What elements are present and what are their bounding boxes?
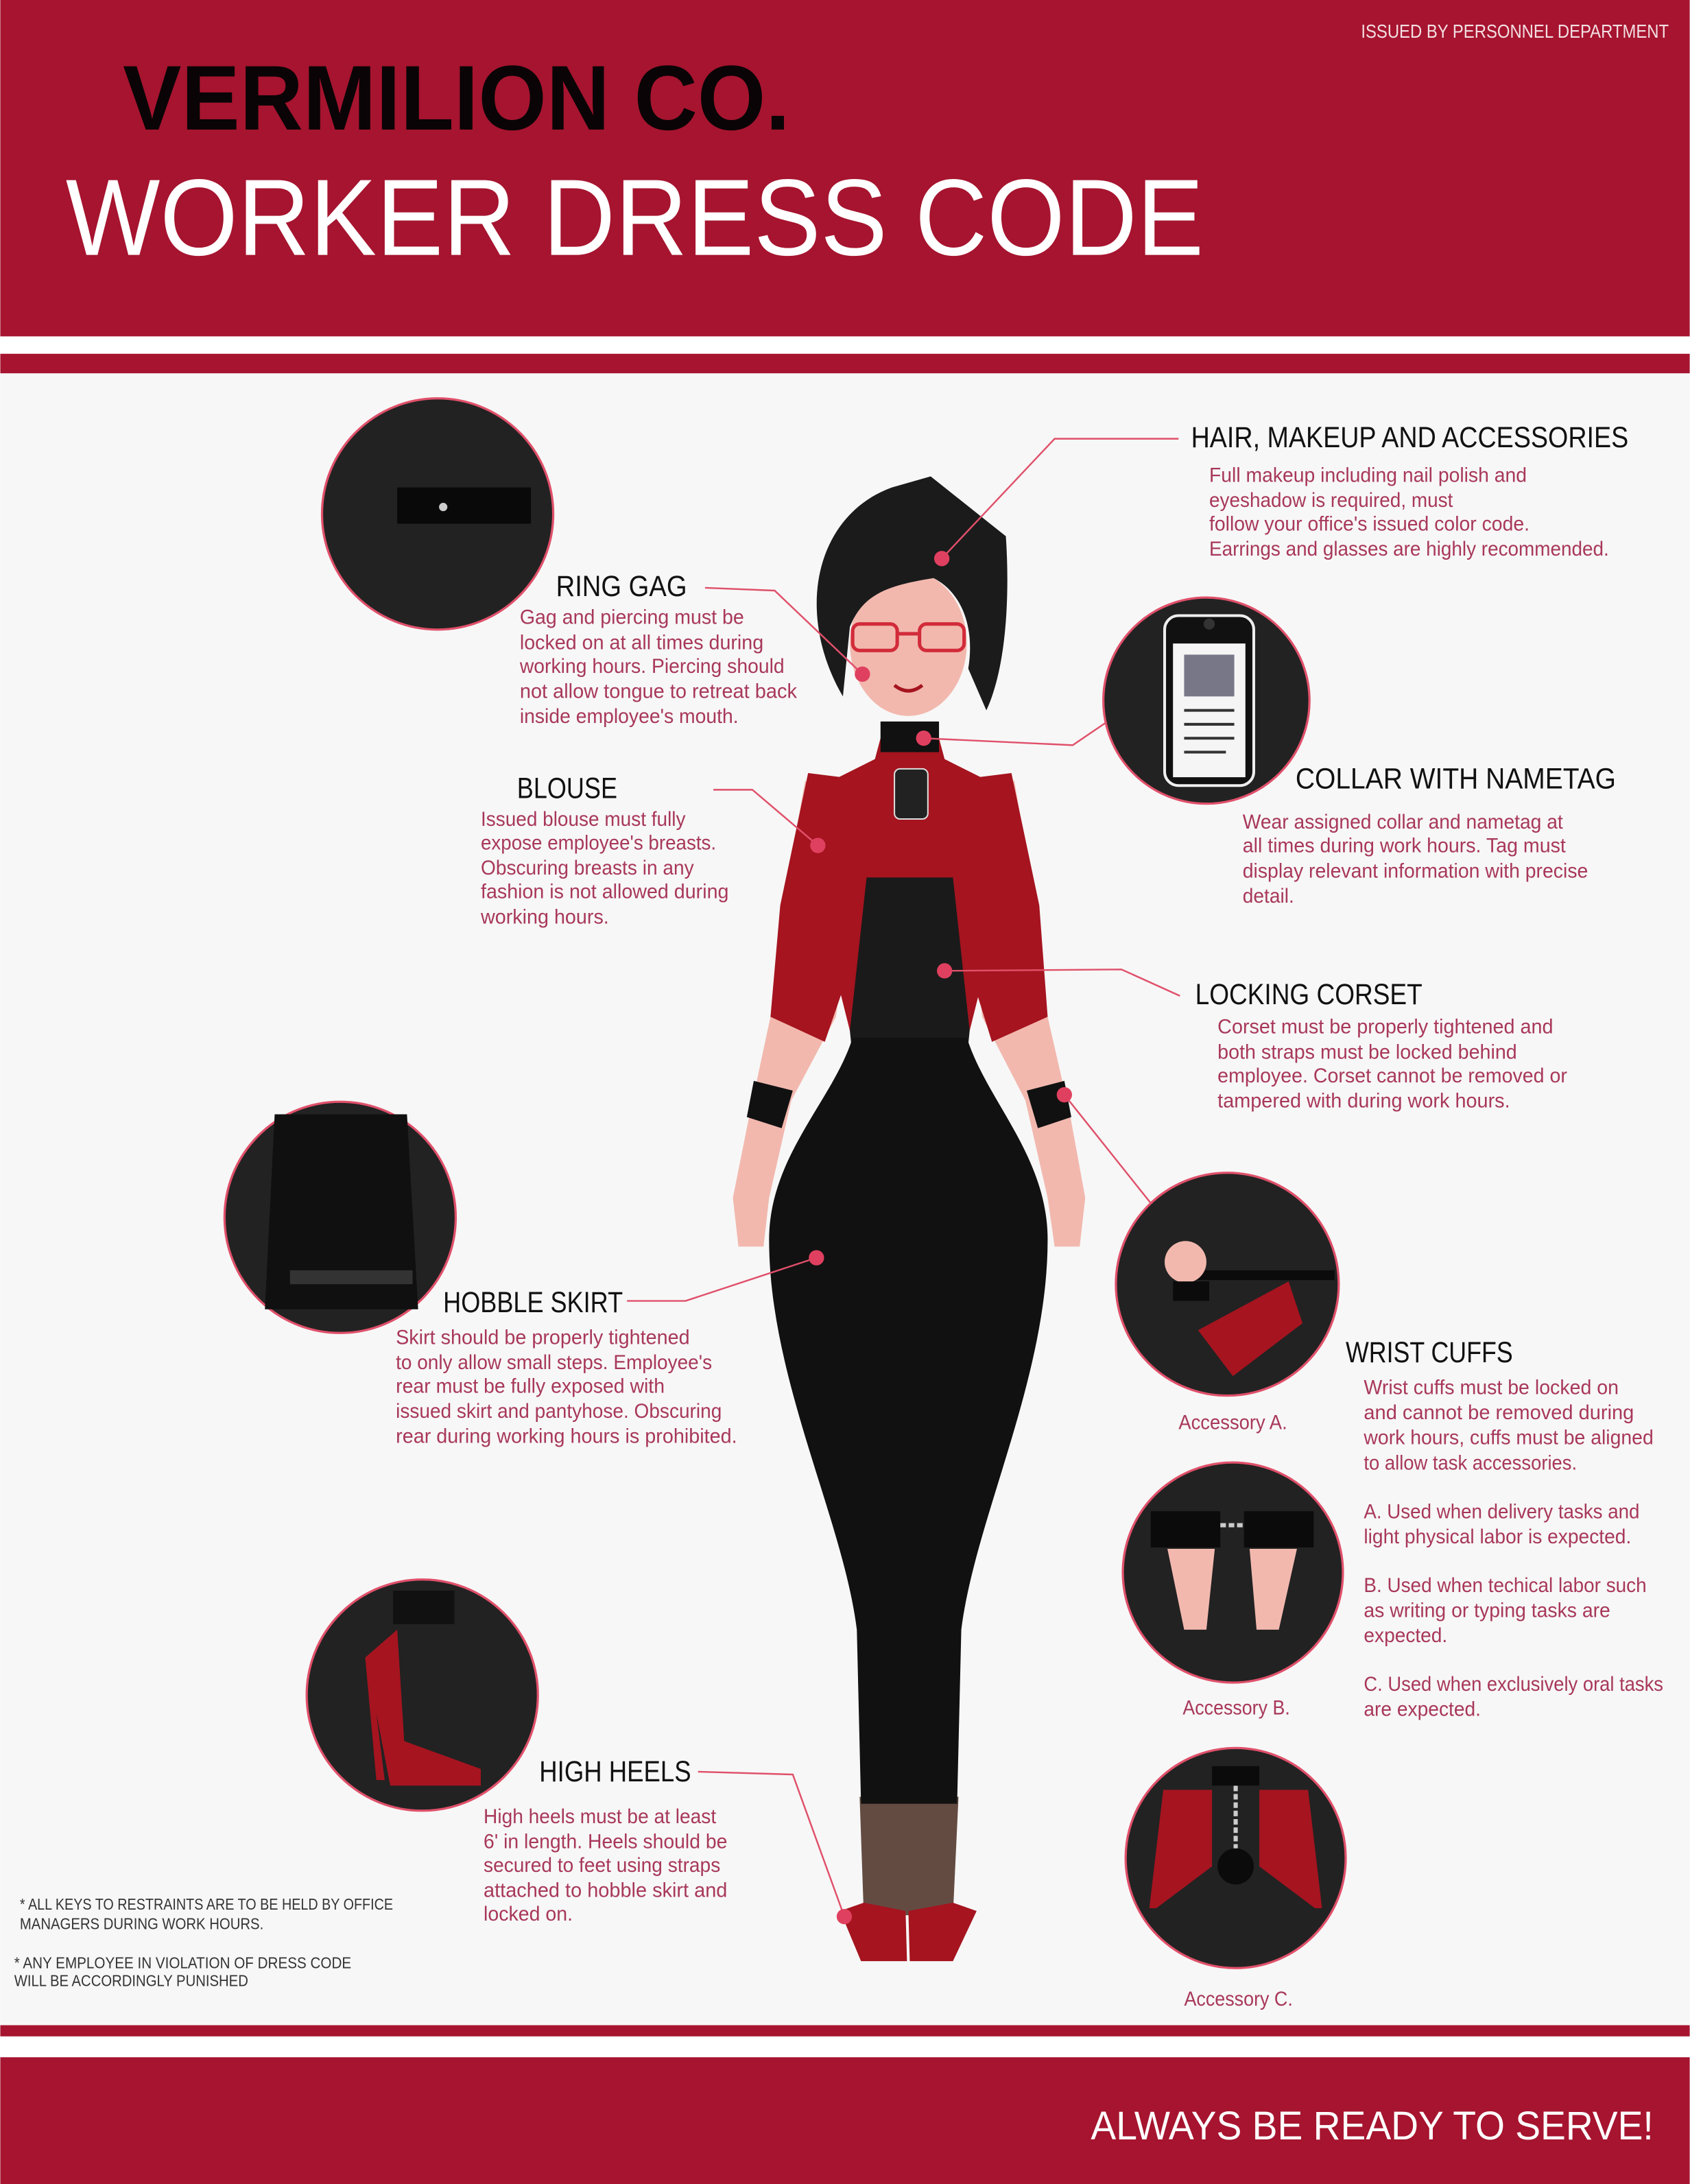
section: locking corset: tampered with during work hours. xyxy=(1217,1089,1510,1112)
section: wrist cuffs: WRIST CUFFS xyxy=(1346,1336,1513,1369)
content panel xyxy=(0,354,1690,2037)
section: wrist cuffs: light physical labor is expected. xyxy=(1364,1526,1631,1548)
callout circle: ring gag strap xyxy=(322,399,554,630)
section: hair, makeup and accessories: Earrings and glasses are highly recommended. xyxy=(1209,538,1609,560)
section: wrist cuffs: expected. xyxy=(1364,1624,1447,1647)
callout circle: accessory A xyxy=(1116,1173,1339,1396)
section: ring gag: Gag and piercing must be xyxy=(520,606,744,629)
section: hair, makeup and accessories: eyeshadow is required, must xyxy=(1209,489,1453,512)
section: high heels xyxy=(484,1755,727,1925)
section: wrist cuffs xyxy=(1346,1336,1663,1721)
section: ring gag: not allow tongue to retreat back xyxy=(520,680,797,702)
section: collar with nametag: Wear assigned collar and nametag at xyxy=(1243,811,1563,833)
section: wrist cuffs: A. Used when delivery tasks and xyxy=(1364,1500,1639,1523)
legs xyxy=(859,1796,958,1915)
section: hobble skirt: Skirt should be properly tightened xyxy=(396,1327,690,1349)
callout circle: hobble skirt strap xyxy=(224,1102,455,1333)
section: hobble skirt: to only allow small steps. Employee's xyxy=(396,1351,712,1374)
section: high heels: secured to feet using straps xyxy=(484,1854,720,1877)
left arm xyxy=(733,780,853,1246)
section: locking corset: LOCKING CORSET xyxy=(1195,978,1423,1011)
section: blouse: expose employee's breasts. xyxy=(481,832,716,855)
section: wrist cuffs: Wrist cuffs must be locked on xyxy=(1364,1377,1619,1399)
section: high heels: HIGH HEELS xyxy=(539,1755,691,1788)
caption: accessory B: Accessory B. xyxy=(1182,1697,1290,1720)
section: blouse: Obscuring breasts in any xyxy=(481,857,694,879)
section: blouse: BLOUSE xyxy=(517,772,617,805)
glasses xyxy=(853,624,964,650)
footer band xyxy=(0,2057,1690,2184)
section: wrist cuffs: C. Used when exclusively oral tasks xyxy=(1364,1673,1663,1696)
section: hair, makeup and accessories: HAIR, MAKEUP AND ACCESSORIES xyxy=(1191,421,1628,454)
section: wrist cuffs: to allow task accessories. xyxy=(1364,1451,1577,1474)
clothed stand-in figure xyxy=(733,476,1085,1961)
section: high heels: 6' in length. Heels should be xyxy=(484,1831,727,1853)
section: blouse: Issued blouse must fully xyxy=(481,808,686,831)
section: collar with nametag xyxy=(1243,762,1616,907)
callout circle: accessory B xyxy=(1123,1462,1343,1683)
section: ring gag: working hours. Piercing should xyxy=(519,655,785,678)
connector lines xyxy=(627,439,1180,1924)
section: hobble skirt: rear during working hours is prohibited. xyxy=(396,1425,737,1448)
high-neck top xyxy=(805,738,1014,1031)
corset xyxy=(850,877,970,1087)
section: hair, makeup and accessories xyxy=(1191,421,1628,560)
section: blouse: fashion is not allowed during xyxy=(481,881,728,903)
section: blouse xyxy=(480,772,728,928)
footnotes: * ANY EMPLOYEE IN VIOLATION OF DRESS CODE xyxy=(14,1954,351,1971)
callout circle: nametag xyxy=(1104,597,1309,804)
footnotes: MANAGERS DURING WORK HOURS. xyxy=(20,1914,263,1932)
section: wrist cuffs: B. Used when techical labor such xyxy=(1364,1574,1647,1597)
section: locking corset xyxy=(1195,978,1567,1112)
section: high heels: attached to hobble skirt and xyxy=(484,1879,727,1902)
section: blouse: working hours. xyxy=(480,905,609,928)
callout circle: high heel xyxy=(307,1580,538,1811)
hobble skirt xyxy=(769,1038,1047,1804)
slogan: ALWAYS BE READY TO SERVE! xyxy=(1091,2104,1654,2148)
nametag xyxy=(894,769,928,819)
hair xyxy=(817,476,1008,711)
section: locking corset: both straps must be locked behind xyxy=(1217,1041,1517,1063)
section: hobble skirt: rear must be fully exposed with xyxy=(396,1375,665,1398)
section: locking corset: Corset must be properly tightened and xyxy=(1217,1016,1554,1038)
footnotes: * ALL KEYS TO RESTRAINTS ARE TO BE HELD BY OFFICE xyxy=(20,1895,393,1913)
footnotes: WILL BE ACCORDINGLY PUNISHED xyxy=(14,1972,248,1990)
company title: VERMILION CO. xyxy=(123,47,790,150)
caption: accessory A: Accessory A. xyxy=(1178,1411,1287,1434)
shoes xyxy=(840,1903,977,1961)
right sleeve xyxy=(955,773,1047,1042)
callout circle: accessory C xyxy=(1126,1748,1346,1968)
section: ring gag: locked on at all times during xyxy=(520,631,763,654)
section: wrist cuffs: are expected. xyxy=(1364,1698,1481,1721)
section: locking corset: employee. Corset cannot be removed or xyxy=(1217,1065,1567,1087)
section: collar with nametag: detail. xyxy=(1243,885,1294,907)
footnotes xyxy=(14,1895,393,1990)
section: hobble skirt: HOBBLE SKIRT xyxy=(443,1286,623,1319)
section: collar with nametag: COLLAR WITH NAMETAG xyxy=(1296,762,1616,795)
left sleeve xyxy=(770,773,864,1042)
face xyxy=(850,571,967,716)
section: hobble skirt xyxy=(396,1286,737,1448)
section: ring gag xyxy=(519,570,797,728)
main title: WORKER DRESS CODE xyxy=(66,157,1204,278)
section: wrist cuffs: work hours, cuffs must be aligned xyxy=(1363,1427,1654,1449)
wrist cuffs xyxy=(747,1081,1071,1128)
section: hobble skirt: issued skirt and pantyhose. Obscuring xyxy=(396,1400,722,1423)
section: ring gag: inside employee's mouth. xyxy=(520,705,739,728)
section: high heels: locked on. xyxy=(484,1903,573,1925)
section: ring gag: RING GAG xyxy=(556,570,687,603)
caption: accessory C: Accessory C. xyxy=(1184,1988,1293,2010)
section: wrist cuffs: and cannot be removed during xyxy=(1364,1401,1634,1424)
collar xyxy=(881,722,939,752)
section: collar with nametag: all times during work hours. Tag must xyxy=(1243,835,1566,857)
section: hair, makeup and accessories: follow your office's issued color code. xyxy=(1209,513,1530,536)
section: collar with nametag: display relevant information with precise xyxy=(1243,859,1588,882)
section: high heels: High heels must be at least xyxy=(484,1805,716,1828)
mouth xyxy=(894,685,923,691)
section: hair, makeup and accessories: Full makeup including nail polish and xyxy=(1209,464,1527,487)
right arm xyxy=(968,780,1085,1246)
section: wrist cuffs: as writing or typing tasks are xyxy=(1364,1600,1610,1622)
header band xyxy=(0,0,1690,336)
